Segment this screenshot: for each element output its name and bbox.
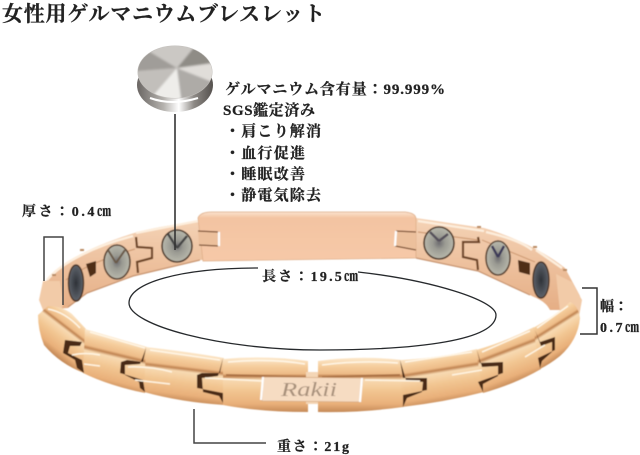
link gaps back (136, 237, 152, 273)
germanium stones (68, 227, 549, 301)
plate tabs (198, 231, 219, 246)
back band (42, 218, 580, 310)
link gaps front (63, 340, 84, 373)
title: 女性用ゲルマニウムブレスレット (2, 2, 325, 26)
germanium spec text: ・静電気除去 (225, 186, 322, 204)
width label: 幅： (600, 298, 628, 315)
engraved plate (261, 377, 363, 402)
germanium spec text: ・睡眠改善 (225, 165, 305, 183)
thickness label: 厚さ：0.4㎝ (22, 203, 111, 220)
length loop (129, 268, 496, 350)
highlights (72, 345, 545, 384)
thickness bracket (44, 237, 63, 305)
width bracket (580, 288, 597, 334)
rivets (52, 227, 567, 275)
germanium spec text (223, 80, 445, 204)
leader: disc to stone (174, 114, 176, 250)
bracelet (38, 212, 582, 412)
end links (39, 281, 63, 315)
weight label: 重さ：21g (277, 438, 349, 455)
germanium spec text: ・肩こり解消 (225, 122, 321, 140)
weight bracket (194, 409, 266, 443)
back band top strip (47, 221, 562, 280)
width label (600, 298, 639, 336)
length label: 長さ：19.5㎝ (262, 268, 358, 285)
germanium spec text: ゲルマニウム含有量：99.999% (225, 80, 445, 98)
width label: 0.7㎝ (600, 321, 639, 336)
icon: germanium disc (137, 46, 213, 112)
front links (38, 306, 86, 373)
centre plate (198, 212, 416, 261)
germanium spec text: ・血行促進 (225, 144, 305, 162)
engraved plate: Rakii (280, 379, 337, 401)
germanium spec text: SGS鑑定済み (223, 101, 315, 119)
